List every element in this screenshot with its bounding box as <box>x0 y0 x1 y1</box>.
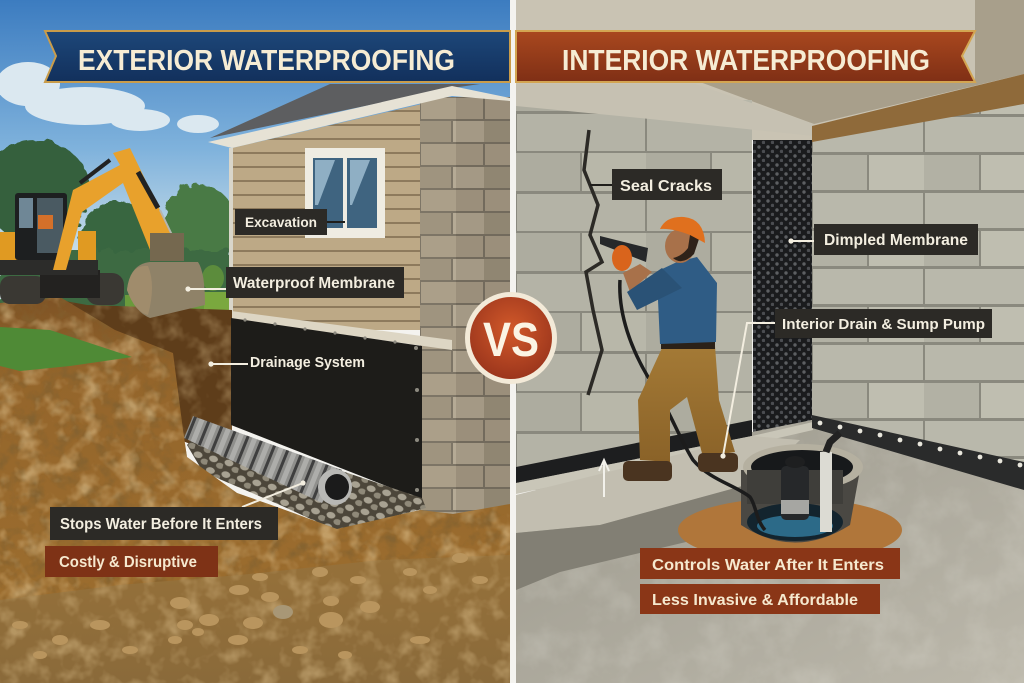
sleeve <box>627 268 682 310</box>
downspout <box>229 148 233 316</box>
trees <box>0 140 236 310</box>
panel: interior waterproofing <box>516 0 1024 683</box>
bucket linkage <box>150 233 184 261</box>
cab <box>15 193 67 260</box>
label: seal cracks <box>590 169 722 200</box>
gravel bed <box>187 425 426 531</box>
wall base membrane right <box>812 415 1024 490</box>
small up arrow <box>599 460 609 497</box>
brick corner <box>420 97 510 515</box>
panel: exterior waterproofing <box>0 0 510 683</box>
label: stops water <box>50 480 306 540</box>
VS badge: VS <box>483 314 539 367</box>
sky <box>0 0 510 330</box>
drill <box>600 236 648 262</box>
drainage pipe <box>184 416 352 505</box>
sump pit <box>741 444 863 542</box>
legs <box>638 346 735 462</box>
label: seal cracks: Seal Cracks <box>620 178 712 195</box>
hair and beard <box>673 235 700 261</box>
forearm <box>623 264 652 292</box>
foreground stones <box>12 553 488 659</box>
label: excavation <box>235 209 345 235</box>
glove <box>612 245 632 271</box>
wall base membrane left <box>516 420 813 494</box>
title banner: exterior: EXTERIOR WATERPROOFING <box>78 45 455 77</box>
boots <box>623 453 738 481</box>
foreground ground <box>0 555 510 683</box>
VS badge <box>465 292 557 384</box>
sump pump <box>781 433 840 532</box>
label: waterproof membrane: Waterproof Membrane <box>233 275 395 292</box>
sand around pit <box>678 498 902 562</box>
label: drainage system: Drainage System <box>250 354 365 371</box>
label: controls water <box>640 548 900 579</box>
label: interior drain and sump pump: Interior Drain & Sump Pump <box>782 316 985 333</box>
clouds <box>0 62 219 133</box>
label: costly and disruptive: Costly & Disruptive <box>59 554 197 571</box>
hydraulic cylinders <box>80 160 172 235</box>
right block wall <box>812 90 1024 490</box>
title banner: interior <box>516 31 975 82</box>
hard hat <box>660 217 705 243</box>
label: controls water: Controls Water After It Enters <box>652 557 884 574</box>
label: less invasive <box>640 584 880 614</box>
membrane rivets <box>243 318 419 492</box>
torso <box>658 257 717 344</box>
floor <box>516 420 1024 683</box>
label: interior drain and sump pump <box>720 309 992 459</box>
wood beam <box>812 74 1024 142</box>
bucket <box>127 262 205 318</box>
house siding wall <box>232 97 452 330</box>
left concrete beam <box>516 84 814 136</box>
background lawn and bush <box>125 265 232 311</box>
label: less invasive: Less Invasive & Affordable <box>652 592 858 609</box>
soil mound <box>0 297 510 683</box>
window <box>305 148 385 238</box>
machine body <box>0 231 98 275</box>
head <box>665 229 695 263</box>
hose <box>620 280 765 530</box>
belt <box>661 340 715 349</box>
label: stops water: Stops Water Before It Enters <box>60 516 262 533</box>
title banner: exterior <box>45 31 510 82</box>
wall crack <box>584 130 602 395</box>
label: waterproof membrane <box>185 267 404 298</box>
trench soil <box>60 300 232 460</box>
tracks <box>0 270 124 305</box>
label: costly and disruptive <box>45 546 218 577</box>
label: dimpled membrane <box>788 224 978 255</box>
foundation lip <box>231 311 452 350</box>
divider <box>510 0 516 683</box>
title banner: interior: INTERIOR WATERPROOFING <box>562 45 930 77</box>
grass patch <box>0 327 132 371</box>
roof <box>208 84 510 148</box>
excavator <box>0 148 205 318</box>
worker <box>600 217 738 481</box>
ceiling shade <box>516 0 1024 124</box>
dimpled membrane <box>753 140 812 434</box>
ceiling <box>516 0 1024 140</box>
boom and stick <box>53 148 172 270</box>
label: dimpled membrane: Dimpled Membrane <box>824 232 968 249</box>
concrete step <box>516 436 800 590</box>
black waterproof membrane <box>231 318 422 500</box>
left block wall <box>516 100 752 490</box>
label: excavation: Excavation <box>245 214 317 230</box>
